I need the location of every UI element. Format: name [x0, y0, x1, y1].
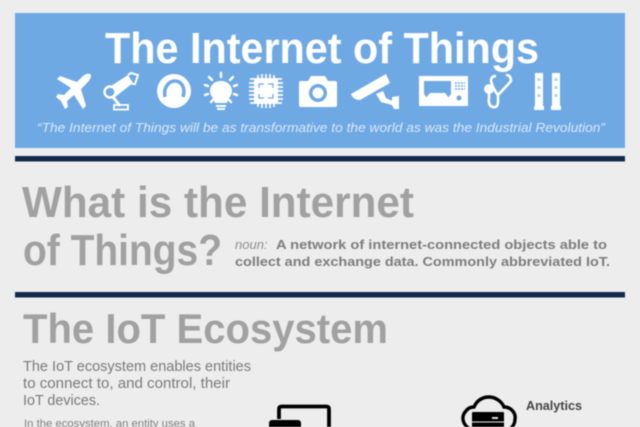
icon: stethoscope: [485, 75, 511, 107]
divider rule bottom: [15, 292, 625, 298]
title: The Internet of Things: [105, 24, 539, 73]
icon: speakers: [534, 73, 561, 110]
icon: airplane: [56, 74, 91, 109]
intro text: to connect to, and control, their: [23, 376, 230, 392]
intro text: IoT devices.: [23, 393, 100, 409]
icon: robot arm: [104, 73, 138, 110]
icon: microchip: [249, 74, 283, 108]
definition text: noun:: [235, 237, 268, 252]
label: analytics: Analytics: [526, 398, 582, 413]
icon: camera: [299, 76, 337, 107]
heading: what is the internet of things: of Things?: [23, 226, 222, 275]
panel: header banner: [15, 13, 625, 148]
icon: light bulb: [205, 73, 237, 110]
heading: what is the internet of things: What is the Internet: [22, 178, 414, 227]
definition text: collect and exchange data. Commonly abbreviated IoT.: [235, 254, 610, 269]
icon: microwave: [419, 76, 468, 106]
divider rule top: [15, 156, 625, 162]
icon: connected devices: [269, 406, 329, 427]
heading: the IoT ecosystem: The IoT Ecosystem: [23, 305, 388, 352]
panel: definition: [22, 178, 610, 275]
definition text: A network of internet-connected objects able to: [276, 237, 607, 252]
icon: circular gauge: [157, 74, 191, 108]
icon: cloud server: [463, 397, 515, 427]
icon: security camera: [351, 74, 399, 109]
quote: “The Internet of Things will be as transformative to the world as was the Industrial Revolution”: [37, 120, 606, 135]
panel: IoT ecosystem: [23, 305, 593, 427]
intro text: The IoT ecosystem enables entities: [23, 359, 251, 375]
